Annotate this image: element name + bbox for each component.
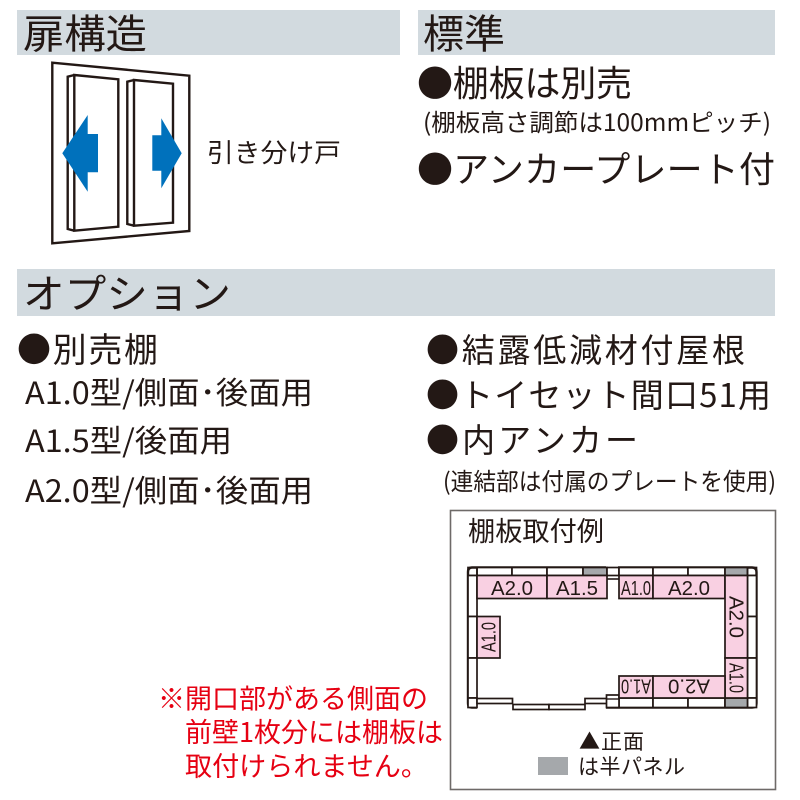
shelf A1.0 right side: A1.0 (724, 663, 748, 693)
standard note: shelf pitch: (棚板高さ調節は100mmピッチ) (423, 103, 771, 138)
red note: side with opening (158, 678, 443, 784)
heading band: options: オプション (23, 262, 231, 320)
red note: side with opening: 前壁1枚分には棚板は (185, 711, 443, 750)
outer walls (468, 568, 756, 708)
shelf A1.5: A1.5 (556, 577, 598, 600)
heading band: door structure (17, 2, 400, 60)
shelf A2.0 bottom: A2.0 (668, 674, 710, 698)
shelf A1.5 (547, 576, 607, 600)
option list: separately sold shelves: A1.5型/後面用 (25, 416, 232, 461)
shelf A2.0 top right: A2.0 (668, 577, 710, 600)
icon: sliding door with arrows (52, 63, 189, 243)
option list: separately sold shelves: ●別売棚 (17, 323, 158, 372)
front marker: ▲正面 (579, 726, 644, 756)
shelf A2.0 top right (653, 576, 725, 600)
front doors (477, 695, 619, 710)
heading band: door structure: 扉構造 (23, 2, 147, 60)
top wall panels (468, 568, 756, 579)
option list: accessories: ●トイセット間口51用 (426, 369, 771, 417)
shelf A2.0 right side: A2.0 (724, 596, 748, 638)
shelf A2.0 top left: A2.0 (491, 577, 533, 600)
option list: separately sold shelves (17, 323, 313, 511)
red note: side with opening: ※開口部がある側面の (158, 678, 428, 716)
shelf A2.0 right side (724, 576, 748, 658)
panel heading: 棚板取付例 (468, 510, 604, 549)
heading band: standard (418, 2, 775, 60)
standard item: anchor plate: ●アンカープレート付 (417, 141, 775, 193)
shelf A1.0 top (619, 576, 653, 600)
option list: accessories: (連結部は付属のプレートを使用) (443, 462, 776, 497)
option list: accessories: ●内アンカー (426, 414, 638, 462)
red note: side with opening: 取付けられません。 (185, 745, 428, 784)
option list: separately sold shelves: A2.0型/側面･後面用 (25, 466, 313, 511)
floor plan (468, 568, 756, 710)
option list: accessories (426, 324, 776, 497)
option list: separately sold shelves: A1.0型/側面･後面用 (25, 368, 313, 413)
panel: shelf installation example (450, 510, 776, 790)
side wall panels (468, 576, 756, 708)
door type label: 引き分け戸 (207, 133, 341, 170)
shelf A2.0 top left (477, 576, 547, 600)
heading band: options (17, 262, 775, 320)
option list: accessories: ●結露低減材付屋根 (426, 324, 745, 372)
heading band: standard: 標準 (423, 2, 505, 60)
shelf A2.0 bottom (653, 674, 725, 698)
legend: half panel: は半パネル (578, 751, 685, 781)
bottom wall panels (619, 698, 748, 708)
standard item: shelf sold separately: ●棚板は別売 (417, 55, 632, 107)
shelf A1.0 bottom: A1.0 (621, 674, 651, 698)
shelf A1.0 left side: A1.0 (478, 622, 500, 652)
shelf A1.0 top: A1.0 (621, 577, 651, 600)
